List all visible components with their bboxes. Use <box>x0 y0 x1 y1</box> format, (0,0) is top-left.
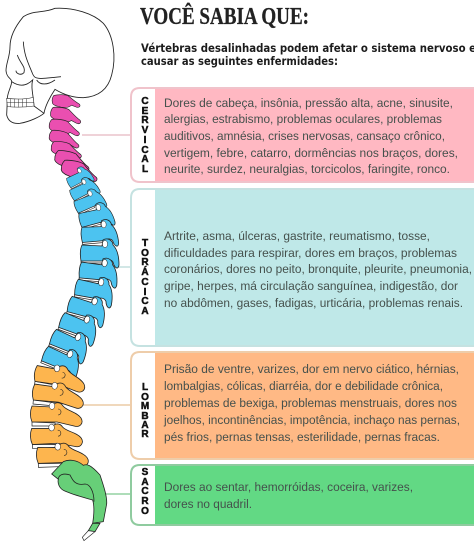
cervical conditions: auditivos, amnésia, crises nervosas, cansaço crônico, <box>164 129 445 143</box>
cervical label: C <box>141 145 149 156</box>
toracica conditions <box>164 229 472 310</box>
cervical conditions: Dores de cabeça, insônia, pressão alta, acne, sinusite, <box>164 96 453 110</box>
lombar label <box>141 382 149 440</box>
title: VOCÊ SABIA QUE: <box>140 3 309 30</box>
skull illustration <box>6 8 114 123</box>
sacro label: C <box>141 486 149 497</box>
cervical label: L <box>142 164 148 175</box>
lombar label: M <box>141 401 149 412</box>
toracica label: C <box>141 277 149 288</box>
toracica conditions: no abdômen, gases, fadigas, urticária, problemas renais. <box>164 296 463 310</box>
sacro label: S <box>142 467 149 478</box>
cervical label: I <box>144 135 147 146</box>
toracica label <box>141 238 149 317</box>
lombar label: A <box>141 420 149 431</box>
cervical label: V <box>142 125 149 136</box>
cervical conditions: neurite, surdez, neuralgias, torcicolos, faringite, ronco. <box>164 162 450 176</box>
lombar conditions: lombalgias, cólicas, diarréia, dor e debilidade crônica, <box>164 379 443 393</box>
lombar conditions <box>163 362 460 444</box>
cervical label <box>141 96 149 175</box>
intro text <box>141 41 474 68</box>
connector: lumbar <box>83 404 131 406</box>
connector: cervical <box>82 134 131 136</box>
lombar conditions: joelhos, incontinências, impotência, inchaço nas pernas, <box>163 413 460 427</box>
intro text: causar as seguintes enfermidades: <box>141 54 338 68</box>
sacro label <box>141 467 149 517</box>
lombar label: O <box>141 392 149 403</box>
toracica conditions: Artrite, asma, úlceras, gastrite, reumatismo, tosse, <box>164 229 430 243</box>
toracica label: I <box>144 287 147 298</box>
lombar conditions: problemas de bexiga, problemas menstruais, dores nos <box>164 396 457 410</box>
spine: thoracic vertebrae <box>38 164 119 382</box>
toracica label: C <box>141 296 149 307</box>
sacro conditions: Dores ao sentar, hemorróidas, coceira, varizes, <box>164 480 413 494</box>
connector: thoracic <box>117 266 131 268</box>
toracica label: A <box>141 306 149 317</box>
toracica label: R <box>141 257 149 268</box>
panel: cervical <box>131 88 474 182</box>
sacro conditions <box>164 480 413 511</box>
lombar conditions: Prisão de ventre, varizes, dor em nervo ciático, hérnias, <box>164 362 459 376</box>
spine: cervical vertebrae <box>47 93 100 185</box>
panel: lombar <box>131 352 474 459</box>
toracica conditions: gripe, herpes, má circulação sanguínea, indigestão, dor <box>164 279 458 293</box>
toracica label: T <box>142 238 148 249</box>
cervical label: C <box>141 96 149 107</box>
lombar label: R <box>141 429 149 440</box>
toracica label: O <box>141 248 149 259</box>
connector: sacrum <box>105 493 131 495</box>
cervical label: A <box>141 154 149 165</box>
toracica conditions: coronários, dores no peito, bronquite, pleurite, pneumonia, <box>164 262 472 276</box>
toracica conditions: dificuldades para respirar, dores em braços, problemas <box>164 246 457 260</box>
spine: lumbar vertebrae <box>30 362 88 468</box>
sacro label: R <box>141 496 149 507</box>
spine: sacrum and coccyx <box>52 460 107 541</box>
toracica label: Á <box>141 265 149 278</box>
panel: sacro <box>131 465 474 525</box>
cervical conditions: vertigem, febre, catarro, dormências nos braços, dores, <box>164 146 458 160</box>
cervical label: R <box>141 115 149 126</box>
cervical conditions <box>164 96 458 176</box>
lombar label: B <box>141 411 149 422</box>
lombar conditions: pés frios, pernas tensas, esterilidade, pernas fracas. <box>164 430 440 444</box>
sacro conditions: dores no quadril. <box>164 497 252 511</box>
panel: toracica <box>131 189 474 346</box>
cervical label: E <box>142 106 149 117</box>
sacro label: O <box>141 506 149 517</box>
sacro label: A <box>141 477 149 488</box>
cervical conditions: alergias, estrabismo, problemas oculares, problemas <box>164 112 442 126</box>
lombar label: L <box>142 382 148 393</box>
